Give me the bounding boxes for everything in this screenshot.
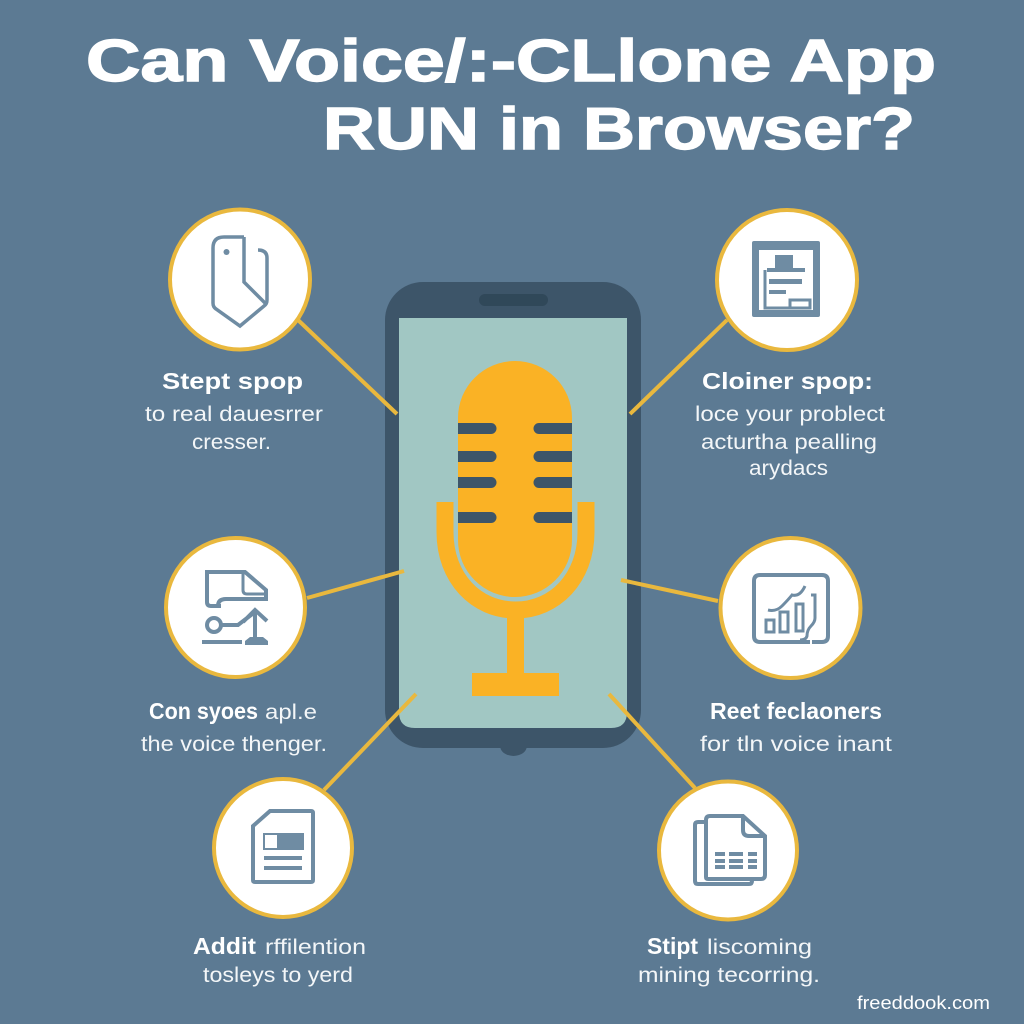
panel: top left icon: [170, 210, 310, 350]
text: middle right: Reet feclaoners: [710, 698, 882, 724]
text: top right: [695, 368, 885, 480]
panel: middle right icon: [720, 538, 860, 678]
text: bottom left: rffilention: [265, 936, 366, 959]
phone: [385, 282, 641, 756]
text: top right: arydacs: [749, 457, 828, 480]
text: bottom left: [193, 933, 366, 987]
panel: top right icon: [717, 210, 857, 350]
text: top left: [145, 368, 323, 454]
text: bottom left: tosleys to yerd: [203, 964, 353, 987]
text: top left: to real dauesrrer: [145, 403, 323, 426]
text: top left: Stept spop: [162, 368, 303, 394]
text: top right: Cloiner spop:: [702, 368, 873, 394]
text: middle right: for tln voice inant: [700, 733, 892, 756]
text: bottom left: Addit: [193, 933, 256, 959]
panel: middle left icon: [166, 538, 305, 677]
text: middle left: [141, 698, 327, 756]
title: RUN in Browser?: [323, 96, 915, 162]
text: bottom right: liscoming: [707, 936, 812, 959]
text: top right: loce your problect: [695, 403, 885, 426]
title: Can Voice/:-CLlone App: [86, 28, 936, 94]
text: middle left: apl.e: [265, 701, 317, 724]
panel: bottom right icon: [659, 782, 797, 920]
text: bottom right: mining tecorring.: [638, 964, 820, 987]
text: bottom right: [638, 933, 820, 987]
icon: microphone: [445, 361, 586, 696]
text: middle right: [700, 698, 892, 756]
text: bottom right: Stipt: [647, 933, 698, 959]
panel: bottom left icon: [214, 779, 352, 917]
text: top left: cresser.: [192, 431, 271, 454]
title: [86, 28, 936, 162]
text: top right: acturtha pealling: [701, 431, 877, 454]
footer credit: freeddook.com: [857, 993, 990, 1013]
text: middle left: Con syoes: [149, 698, 258, 724]
text: middle left: the voice thenger.: [141, 733, 327, 756]
connector lines: [298, 320, 727, 790]
